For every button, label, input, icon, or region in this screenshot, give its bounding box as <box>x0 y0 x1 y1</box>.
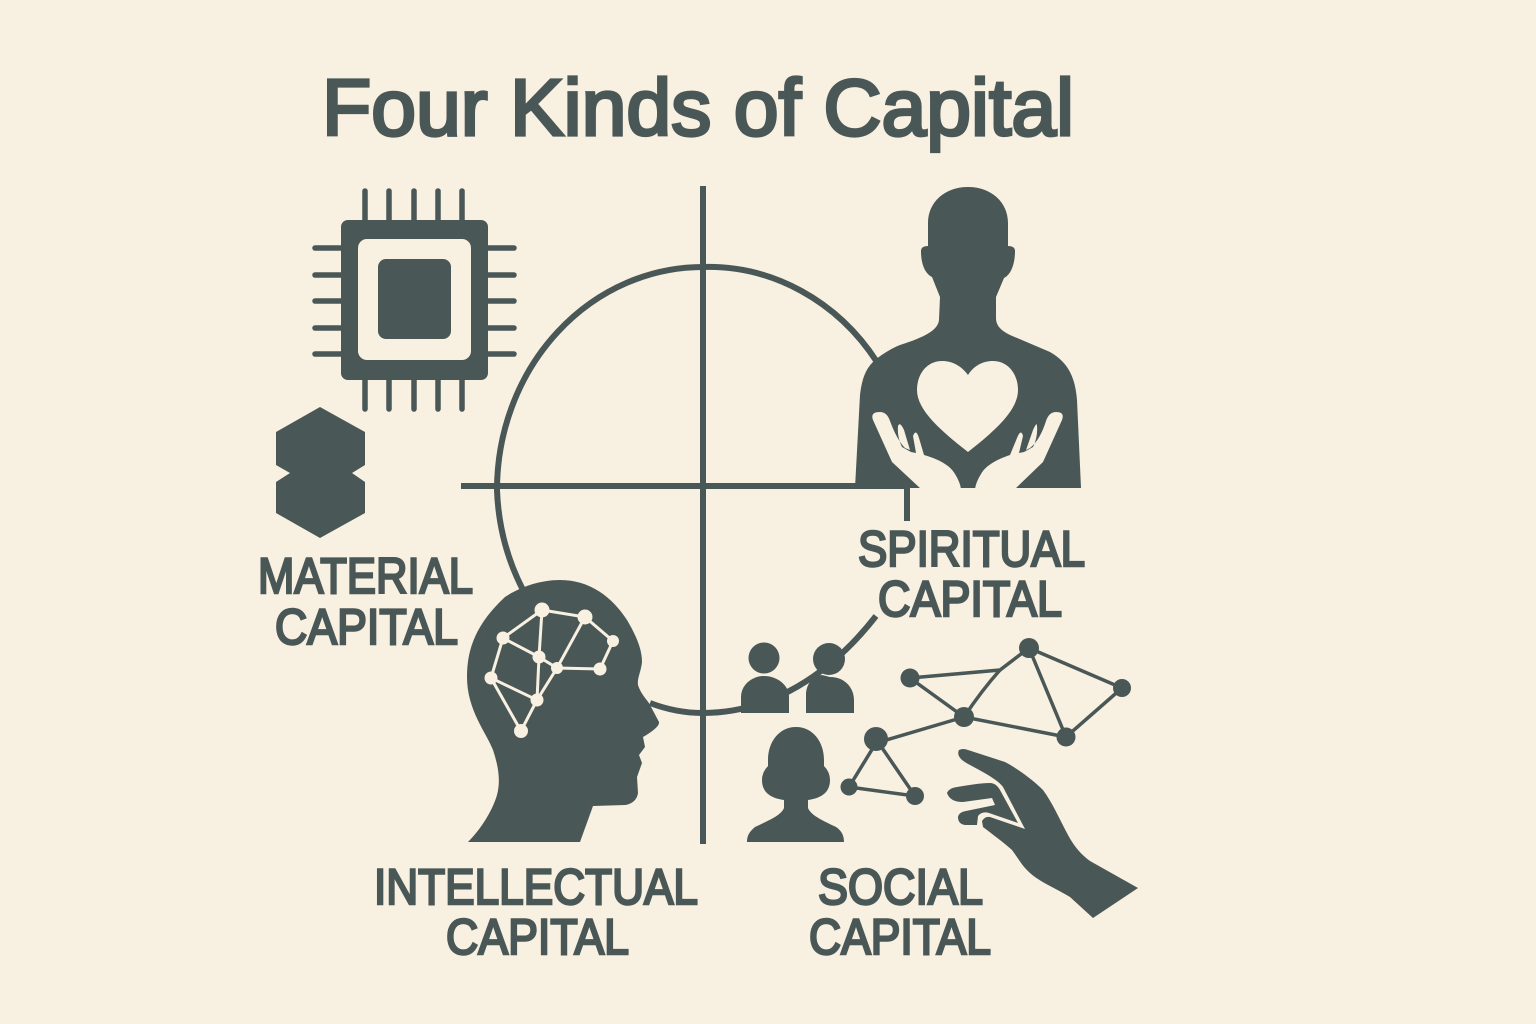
left cupped hand <box>872 412 961 489</box>
icon: person holding heart <box>855 187 1081 489</box>
label: social capital <box>809 859 991 965</box>
label: intellectual capital <box>374 859 698 965</box>
icon: two people <box>741 642 854 713</box>
label: social capital: SOCIAL <box>818 859 983 915</box>
heart cutout <box>917 361 1018 452</box>
label: material capital: MATERIAL <box>258 548 473 604</box>
central circle and cross axes <box>461 186 908 844</box>
title: Four Kinds of Capital <box>322 63 1074 152</box>
icon: reaching hand <box>947 749 1138 918</box>
label: social capital: CAPITAL <box>809 909 991 965</box>
label: spiritual capital: CAPITAL <box>878 571 1062 627</box>
icon: head with neural network <box>467 580 659 842</box>
label: material capital: CAPITAL <box>275 599 458 655</box>
neural network nodes and links <box>484 602 619 738</box>
label: material capital <box>258 548 473 655</box>
label: intellectual capital: INTELLECTUAL <box>374 859 698 915</box>
icon: double hexagon material block <box>276 407 365 538</box>
icon: woman silhouette <box>747 727 844 842</box>
icon: social network graph <box>840 638 1131 805</box>
label: intellectual capital: CAPITAL <box>446 909 629 965</box>
icon: microchip <box>315 191 514 409</box>
right cupped hand <box>975 412 1063 489</box>
label: spiritual capital <box>858 521 1085 627</box>
label: spiritual capital: SPIRITUAL <box>858 521 1085 577</box>
